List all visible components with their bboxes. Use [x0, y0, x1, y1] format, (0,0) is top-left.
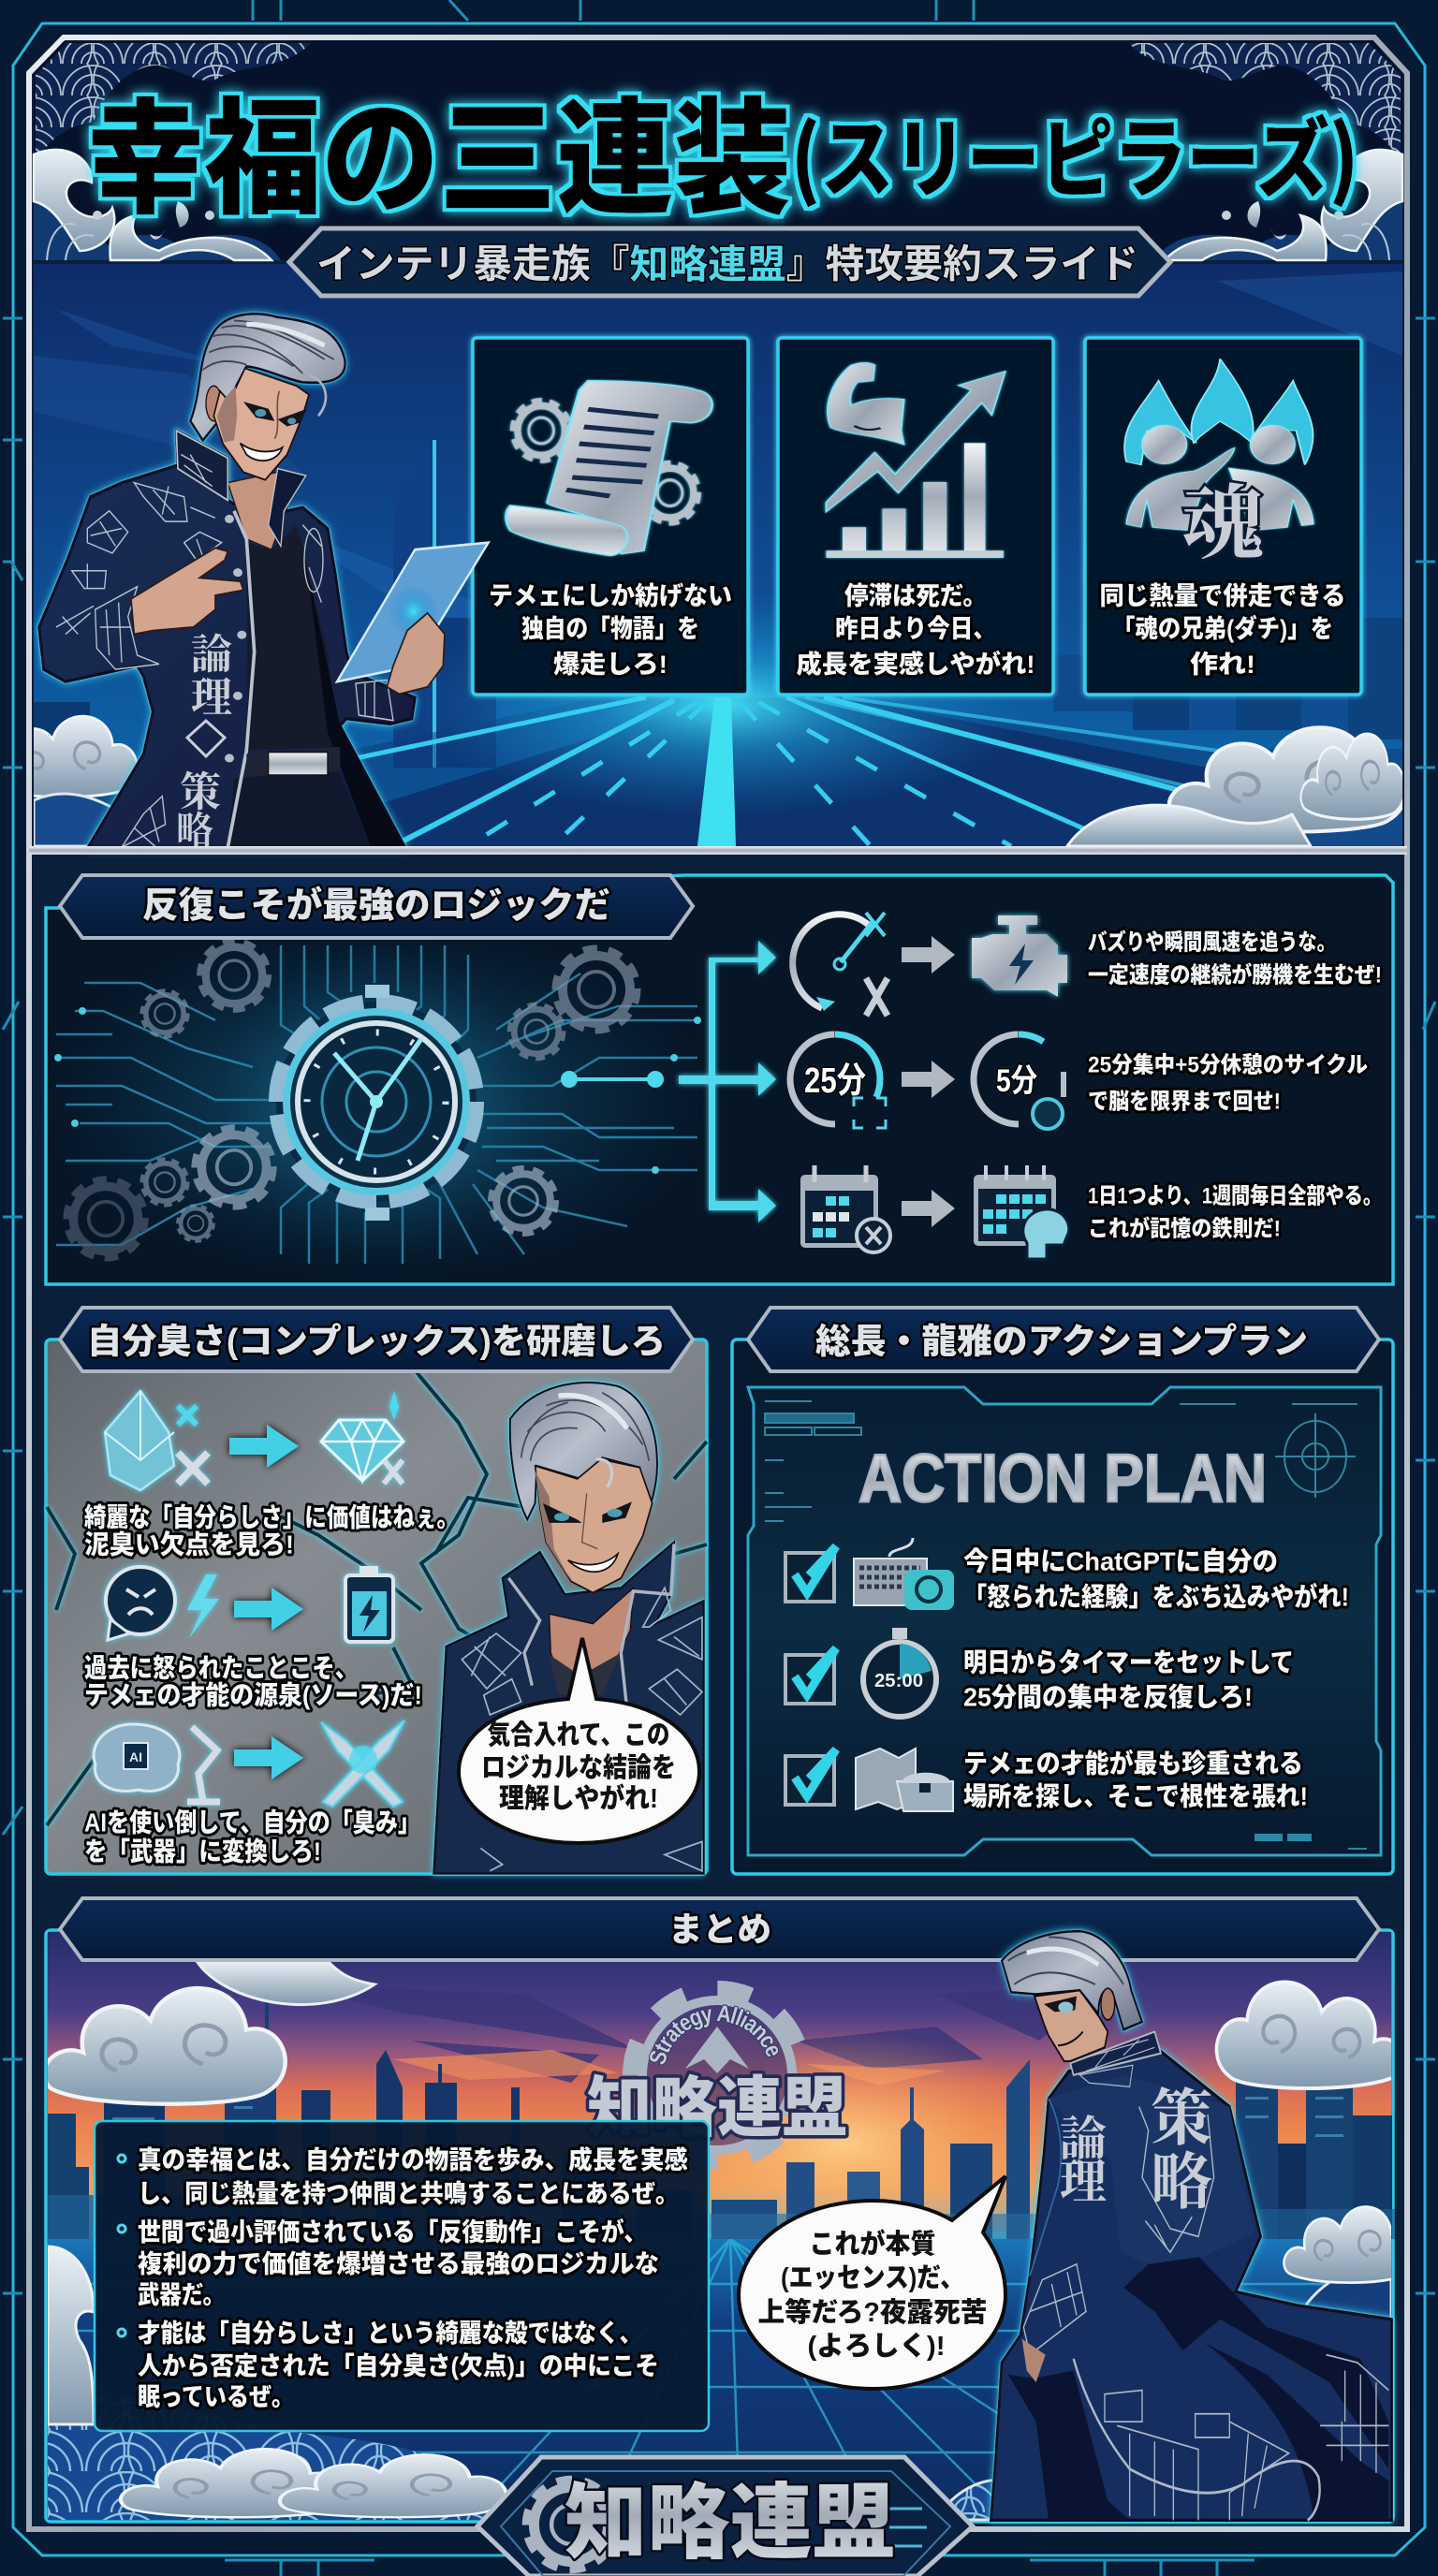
row 3 text: 1日1つより、1週間毎日全部やる。: [1088, 1183, 1382, 1209]
text: row 3: [84, 1808, 420, 1866]
bullet 2: 武器だ。: [138, 2281, 225, 2309]
icon: 25 minute timer: [790, 1034, 886, 1128]
central clock gear: [217, 943, 536, 1261]
icon: brothers with blue flames: [1124, 359, 1313, 575]
text: row 3: を「武器」に変換しろ!: [84, 1837, 321, 1866]
icon: map and treasure chest: [856, 1749, 953, 1811]
bullet 1: 真の幸福とは、自分だけの物語を歩み、成長を実感: [138, 2145, 688, 2174]
speech bubble: back view: これが本質: [809, 2228, 936, 2260]
heading: repetition: [60, 875, 693, 938]
floor grid: [48, 2232, 1391, 2520]
alliance logo: Strategy Alliance: [649, 2004, 779, 2065]
row 2 icons: [790, 1034, 1368, 1129]
speech bubble: back view: (よろしく)!: [807, 2332, 946, 2362]
subtitle banner: インテリ暴走族『知略連盟』特攻要約スライド: [316, 242, 1138, 286]
action 3: 場所を探し、そこで根性を張れ!: [963, 1782, 1308, 1810]
icon: muscle and growth chart: [826, 362, 1005, 558]
speech bubble: bust: 理解しやがれ!: [499, 1782, 658, 1814]
connector node: [561, 1071, 664, 1088]
row 1 text: バズりや瞬間風速を追うな。: [1088, 929, 1336, 955]
circuit mark: [889, 2509, 927, 2546]
row 3 text: [1088, 1183, 1382, 1241]
speech bubble: bust: ロジカルな結論を: [481, 1752, 676, 1783]
city skyline: [34, 440, 1402, 824]
belt: [246, 747, 340, 777]
icon: 5 minute break: 5分: [996, 1063, 1037, 1099]
card 1: [473, 338, 748, 695]
heading: action plan: 総長・龍雅のアクションプラン: [815, 1322, 1308, 1361]
gear mark: [530, 2483, 612, 2566]
cloud top left: [44, 1961, 374, 2104]
card 1 text: [489, 582, 732, 679]
heading: complex: 自分臭さ(コンプレックス)を研磨しろ: [87, 1322, 666, 1361]
text: row 2: 過去に怒られたことこそ、: [84, 1653, 358, 1683]
coat kanji: 策: [1151, 2069, 1212, 2157]
cloud bottom right: [1067, 727, 1405, 846]
small gears: [70, 944, 634, 1254]
text: row 3: AIを使い倒して、自分の「臭み」: [84, 1808, 420, 1837]
grey arrow: [902, 936, 955, 973]
speech bubble: back view: [739, 2176, 1005, 2389]
icon: scroll with gears: [506, 381, 712, 555]
coat folds: [1008, 2256, 1388, 2520]
main title: 幸福の三連装: [87, 56, 791, 240]
cyan arrow: [229, 1425, 299, 1468]
main title: [87, 56, 1358, 240]
cyan arrow: [234, 1588, 303, 1631]
speech bubble: back view: (エッセンス)だ、: [781, 2263, 964, 2293]
hand pointing: [131, 548, 243, 634]
coat circuit embroidery: [1023, 2106, 1388, 2520]
action 2: [785, 1628, 1294, 1717]
divider: [29, 846, 1407, 855]
jacket embroidery: [56, 455, 393, 847]
seigaiha corner left: [36, 43, 311, 164]
AI to weapon row: [84, 1720, 420, 1866]
icon: full calendar with brain: [974, 1165, 1069, 1259]
heading: summary: [60, 1898, 1379, 1960]
icon: lightning: [187, 1574, 219, 1638]
bullet 1: し、同じ熱量を持つ仲間と共鳴することにあるぜ。: [138, 2180, 679, 2208]
action 1: 今日中にChatGPTに自分の: [963, 1546, 1278, 1576]
heading: summary: まとめ: [668, 1910, 771, 1949]
summary city skyline: [48, 2003, 1395, 2239]
bullet 2: [138, 2217, 659, 2309]
text: row 1: 綺麗な「自分らしさ」に価値はねぇ。: [84, 1503, 459, 1531]
panel: summary: [44, 1928, 1395, 2559]
row 1 text: [1088, 929, 1382, 988]
wave right: [1155, 150, 1402, 260]
card 2 text: 停滞は死だ。: [844, 582, 987, 610]
row 1 text: 一定速度の継続が勝機を生むぜ!: [1088, 962, 1382, 988]
icon: AI brain and robot arm: AI: [129, 1749, 142, 1764]
heading: repetition: 反復こそが最強のロジックだ: [142, 886, 610, 926]
wave left: [34, 150, 281, 260]
action 3: [785, 1749, 1308, 1811]
HUD decoration: [765, 1401, 1367, 1849]
icon: engine: [972, 915, 1067, 997]
card 2 text: 成長を実感しやがれ!: [796, 650, 1035, 679]
road: [93, 609, 1402, 846]
action 3: テメェの才能が最も珍重される: [963, 1749, 1303, 1778]
card 2 text: 昨日より今日、: [835, 614, 996, 643]
speech bubble: bust: [459, 1638, 699, 1843]
panel: repetition: [39, 875, 1393, 1284]
bullet 1: [138, 2145, 688, 2208]
action 1: 「怒られた経験」をぶち込みやがれ!: [963, 1582, 1349, 1612]
panel: action plan: [732, 1339, 1393, 1874]
row 2 text: で脳を限界まで回せ!: [1088, 1090, 1281, 1114]
summary text box: [95, 2121, 709, 2431]
row 3 text: これが記憶の鉄則だ!: [1088, 1215, 1281, 1241]
icon: stopwatch: 25:00: [874, 1671, 923, 1691]
cloud bottom left: [34, 715, 138, 846]
jacket kanji on hero: 策: [180, 758, 221, 818]
grey arrow: [902, 1190, 955, 1227]
icon: brothers with blue flames: 魂: [1182, 459, 1264, 575]
bullet 3: [138, 2320, 659, 2411]
tablet: [337, 543, 489, 681]
alliance logo: [584, 1981, 849, 2170]
speech bubble: back view: 上等だろ?夜露死苦: [758, 2296, 987, 2328]
icon: calendar with cross: [800, 1165, 890, 1252]
icon: keyboard and AI: [854, 1538, 954, 1610]
bullet 3: 人から否定された「自分臭さ(欠点)」の中にこそ: [138, 2351, 659, 2380]
card 2 text: [796, 582, 1035, 679]
icon: gauge with cross: [793, 913, 888, 1016]
card 1 text: テメェにしか紡げない: [489, 582, 732, 610]
row 1 icons: [793, 913, 1382, 1016]
character: angry grin bust: [433, 1383, 704, 1874]
seigaiha corner right: [1129, 43, 1401, 164]
branching arrows: [679, 941, 776, 1222]
alliance logo: 知略連盟: [587, 2055, 847, 2150]
text: row 2: テメェの才能の源泉(ソース)だ!: [84, 1681, 422, 1709]
card 2: [778, 338, 1053, 695]
cyan arrow: [234, 1736, 303, 1779]
character: back view in long coat: [990, 1931, 1392, 2520]
footer emblem: [477, 2456, 973, 2576]
icon: stopwatch: [863, 1628, 936, 1717]
title panel: [34, 41, 1402, 260]
waves bottom right: [936, 2480, 1058, 2520]
sky streaks: [34, 271, 1402, 655]
heading: action plan: [748, 1308, 1379, 1371]
sunset sky: [48, 1932, 1391, 2241]
subtitle banner: [34, 228, 1402, 296]
crystal to diamond row: [84, 1391, 459, 1559]
text: row 1: [84, 1503, 459, 1559]
card 3 text: 「魂の兄弟(ダチ)」を: [1112, 614, 1333, 643]
card 1 text: 独自の「物語」を: [521, 615, 699, 643]
bullet 2: 複利の力で価値を爆増させる最強のロジカルな: [138, 2250, 659, 2278]
icon: AI brain and robot arm: [94, 1724, 220, 1802]
sky streaks: [281, 1984, 1105, 2083]
bullet 2: 世間で過小評価されている「反復動作」こそが、: [138, 2217, 647, 2247]
speech bubble: bust: 気合入れて、この: [487, 1720, 670, 1750]
row 2 text: [1088, 1052, 1368, 1114]
card 3 text: 同じ熱量で併走できる: [1099, 582, 1346, 610]
bullet 3: 才能は「自分らしさ」という綺麗な殻ではなく、: [138, 2320, 642, 2348]
panel: hero scene: [0, 264, 1405, 846]
feature cards: [473, 338, 1361, 695]
card 3 text: 作れ!: [1190, 651, 1255, 679]
action 2: 25分間の集中を反復しろ!: [963, 1683, 1253, 1711]
icon: rough crystal: [105, 1391, 208, 1490]
card 1 text: 爆走しろ!: [553, 651, 668, 679]
jacket embroidery: [462, 1588, 702, 1871]
circuit background: [56, 945, 697, 1264]
waves bottom left: [48, 2247, 524, 2520]
circuit glow backdrop: [39, 924, 713, 1280]
row 3 icons: [800, 1165, 1382, 1259]
icon: angry speech bubble: [106, 1567, 175, 1640]
card 3 text: [1099, 582, 1346, 679]
card 3: [1085, 338, 1361, 695]
jacket kanji on hero: 論: [191, 621, 232, 681]
coat kanji: 論: [1060, 2101, 1107, 2169]
action 1: [785, 1538, 1349, 1612]
icon: diamond: [321, 1391, 404, 1484]
grey arrow: [902, 1061, 955, 1098]
icon: 25 minute timer: 25分: [804, 1061, 866, 1101]
jacket kanji on hero: 理: [191, 664, 232, 724]
character: hero pointing with tablet: [39, 314, 489, 848]
panel: complex: [46, 1339, 707, 1874]
cloud top right: [1216, 1983, 1405, 2088]
coat kanji: 理: [1060, 2144, 1107, 2212]
anger to battery row: [84, 1566, 422, 1709]
HUD frame: [748, 1387, 1381, 1855]
wave mid right: [1283, 2205, 1391, 2318]
wall cracks: [47, 1367, 707, 1825]
text: row 2: [84, 1653, 422, 1709]
hand holding tablet: [387, 613, 445, 694]
bullet 3: 眠っているぜ。: [138, 2383, 294, 2411]
action 2: 明日からタイマーをセットして: [963, 1647, 1294, 1677]
coat kanji: [1060, 2069, 1212, 2220]
heading: complex: [60, 1308, 693, 1371]
jacket kanji on hero: [176, 621, 232, 854]
icon: crossed swords: [321, 1720, 404, 1807]
hand in pocket: [1022, 2339, 1046, 2382]
footer logotype: 知略連盟: [565, 2456, 895, 2576]
jacket kanji on hero: 略: [176, 801, 213, 854]
coat kanji: 略: [1151, 2132, 1212, 2220]
face: [206, 386, 222, 421]
row 2 text: 25分集中+5分休憩のサイクル: [1088, 1052, 1368, 1078]
icon: 5 minute break: [974, 1034, 1064, 1129]
text: row 1: 泥臭い欠点を見ろ!: [84, 1530, 294, 1559]
face: [1034, 1990, 1108, 2061]
action plan title: ACTION PLAN: [858, 1442, 1267, 1516]
bullets: [118, 2155, 125, 2336]
icon: battery: [345, 1566, 393, 1642]
